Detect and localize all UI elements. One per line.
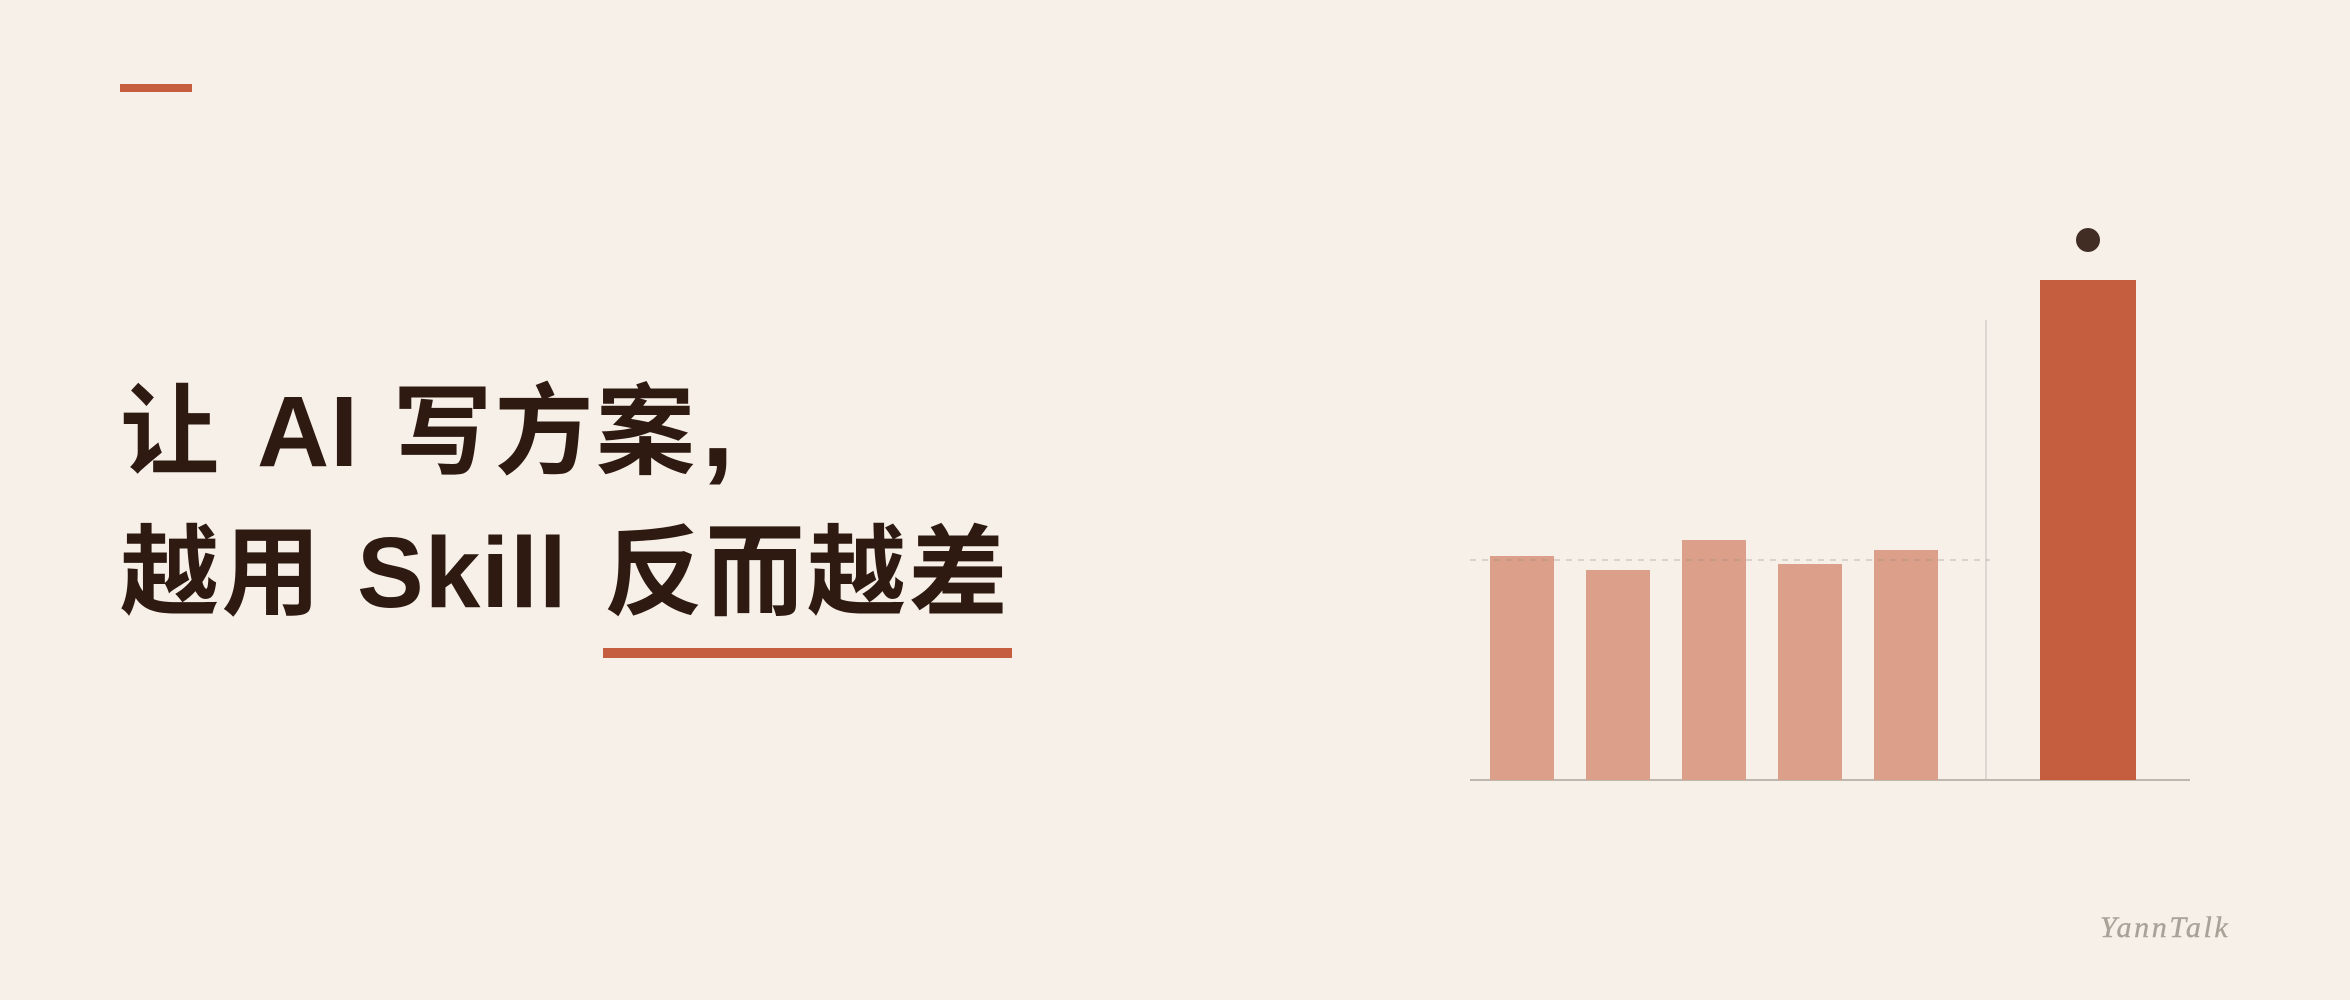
vertical divider — [1985, 320, 1987, 780]
bar chart — [1470, 228, 2190, 781]
dot marker — [2076, 228, 2100, 252]
title underline — [603, 648, 1012, 658]
baseline axis — [1470, 779, 2190, 781]
title line 1: AI — [257, 376, 359, 488]
highlighted bar — [2040, 280, 2136, 780]
regular bars — [1490, 540, 1938, 780]
title line 2: 越用 — [120, 492, 323, 636]
average dashed line — [1470, 559, 1990, 561]
accent bar — [120, 84, 192, 92]
watermark: YannTalk — [2100, 911, 2230, 944]
title line 1: , — [701, 360, 735, 492]
title — [120, 360, 1010, 636]
title line 2: 反而越差 — [604, 492, 1010, 636]
title line 2: Skill — [357, 517, 568, 629]
